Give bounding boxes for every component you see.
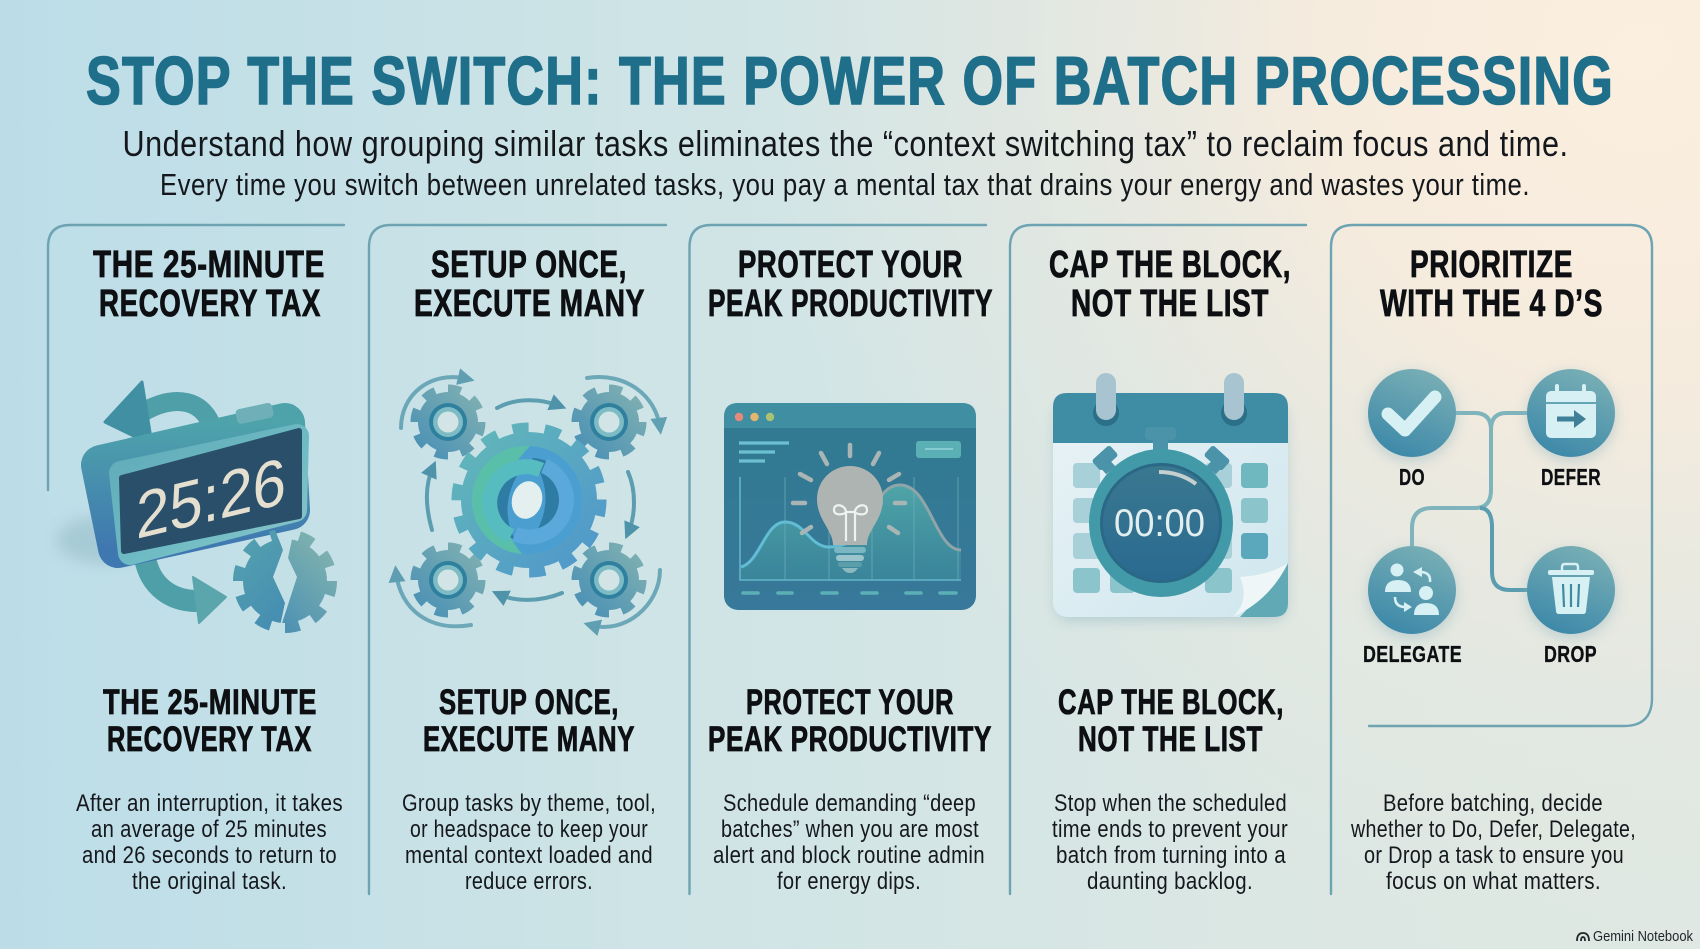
body text: After an interruption, it takes xyxy=(76,790,343,817)
body text xyxy=(1350,790,1636,895)
icon: do xyxy=(1368,369,1456,461)
body text: batch from turning into a xyxy=(1056,842,1286,869)
icon: defer xyxy=(1527,369,1615,461)
lower heading: RECOVERY TAX xyxy=(107,720,312,759)
lower heading: EXECUTE MANY xyxy=(423,720,635,759)
heading: NOT THE LIST xyxy=(1071,283,1269,325)
body text: the original task. xyxy=(132,868,287,895)
icon: calendar with stopwatch: 00:00 xyxy=(1114,502,1205,545)
body text: daunting backlog. xyxy=(1087,868,1253,895)
heading: THE 25-MINUTE xyxy=(93,244,325,286)
icon: gears with cycle arrows xyxy=(396,377,660,627)
label: drop: DROP xyxy=(1544,641,1597,667)
lower heading: PROTECT YOUR xyxy=(746,683,954,722)
body text: focus on what matters. xyxy=(1386,868,1601,895)
heading: PEAK PRODUCTIVITY xyxy=(708,283,993,325)
icon: digital clock with broken gear: 25:26 xyxy=(136,444,286,554)
flow connectors xyxy=(1412,413,1528,590)
body text: Schedule demanding “deep xyxy=(723,790,976,817)
lower heading xyxy=(103,683,317,759)
icon: drop xyxy=(1527,546,1615,638)
body text: batches” when you are most xyxy=(721,816,979,843)
lower heading xyxy=(1058,683,1284,759)
body text: or Drop a task to ensure you xyxy=(1364,842,1624,869)
heading xyxy=(1380,244,1603,325)
label: defer: DEFER xyxy=(1541,464,1601,490)
heading xyxy=(708,244,993,325)
body text xyxy=(402,790,656,895)
heading: EXECUTE MANY xyxy=(414,283,645,325)
body text: and 26 seconds to return to xyxy=(82,842,337,869)
lower heading: SETUP ONCE, xyxy=(439,683,619,722)
body text: reduce errors. xyxy=(465,868,593,895)
lower heading: CAP THE BLOCK, xyxy=(1058,683,1284,722)
panel: peak productivity xyxy=(690,225,993,895)
body text xyxy=(76,790,343,895)
body text: or headspace to keep your xyxy=(410,816,648,843)
heading: SETUP ONCE, xyxy=(431,244,627,286)
icon: dashboard window with light bulb xyxy=(724,403,976,610)
heading xyxy=(1049,244,1291,325)
body text: an average of 25 minutes xyxy=(91,816,327,843)
body text xyxy=(713,790,985,895)
heading: PRIORITIZE xyxy=(1410,244,1573,286)
label: do: DO xyxy=(1399,464,1425,490)
panel: the 4 Ds xyxy=(1331,225,1652,895)
icon: delegate xyxy=(1368,546,1456,638)
heading: CAP THE BLOCK, xyxy=(1049,244,1291,286)
icon: digital clock with broken gear xyxy=(57,382,327,623)
heading: PROTECT YOUR xyxy=(738,244,963,286)
panel: recovery tax xyxy=(48,225,344,895)
heading xyxy=(414,244,645,325)
lower heading: NOT THE LIST xyxy=(1078,720,1263,759)
lower heading xyxy=(708,683,992,759)
body text: alert and block routine admin xyxy=(713,842,985,869)
body text: Group tasks by theme, tool, xyxy=(402,790,656,817)
body text xyxy=(1052,790,1288,895)
panel: setup once xyxy=(369,225,666,895)
body text: whether to Do, Defer, Delegate, xyxy=(1350,816,1636,843)
heading: WITH THE 4 D’S xyxy=(1380,283,1603,325)
body text: Before batching, decide xyxy=(1383,790,1603,817)
label: delegate: DELEGATE xyxy=(1363,641,1462,667)
lower heading: PEAK PRODUCTIVITY xyxy=(708,720,992,759)
lower heading xyxy=(423,683,635,759)
panel: cap the block xyxy=(1010,225,1306,895)
body text: time ends to prevent your xyxy=(1052,816,1288,843)
body text: mental context loaded and xyxy=(405,842,653,869)
heading xyxy=(93,244,325,325)
heading: RECOVERY TAX xyxy=(99,283,321,325)
body text: Stop when the scheduled xyxy=(1054,790,1287,817)
body text: for energy dips. xyxy=(777,868,921,895)
icon: calendar with stopwatch xyxy=(1053,373,1288,620)
lower heading: THE 25-MINUTE xyxy=(103,683,317,722)
